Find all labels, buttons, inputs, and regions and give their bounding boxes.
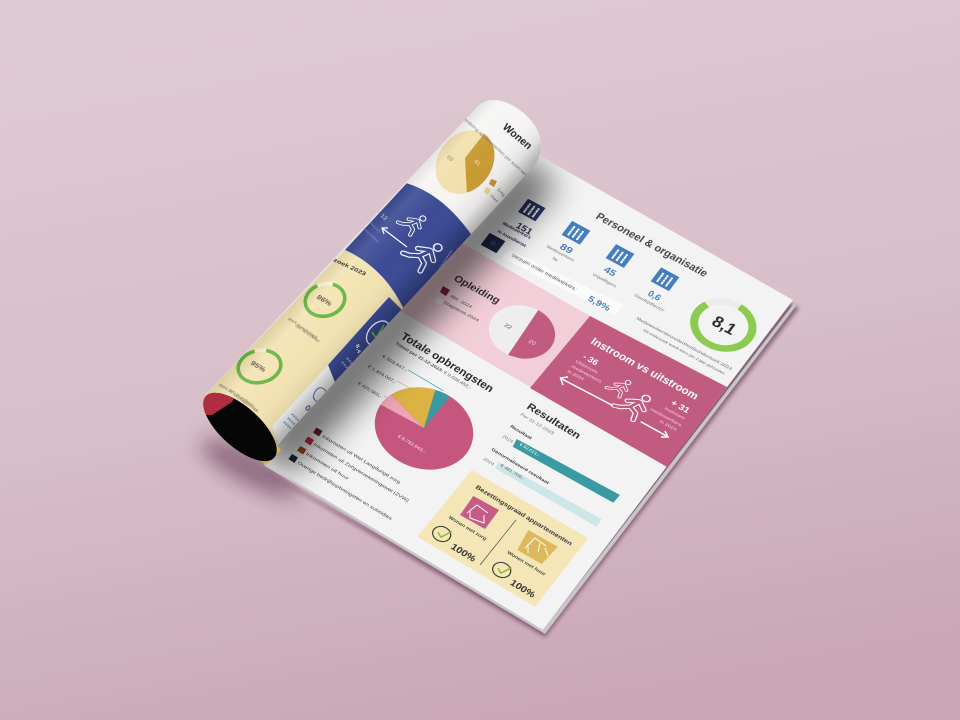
- roll: blue band icons: medewerkers: [361, 226, 380, 244]
- legend: opleiding: Bbl. 2024: [449, 294, 474, 309]
- legend: opbrengsten: [288, 428, 410, 522]
- roll: lower white block icons: [284, 388, 326, 434]
- stat: 0,6 deeltijdfactor: [633, 289, 666, 313]
- roll: wonen subtitle: Verdeling appartementen per soort wonen: [461, 115, 534, 182]
- arrow: instroom right: [641, 422, 668, 437]
- stat: 151 medewerkers in loondienst: in loondienst: [496, 229, 527, 249]
- text: per datum: Per 31-12-2023: [519, 412, 555, 436]
- labels: pie amounts: € 1.304.097,-: [367, 364, 398, 385]
- roll: yellow band heading: zoek 2023: [332, 258, 367, 278]
- roll: blue band icons: [361, 207, 456, 273]
- chart: resultaat bar: [501, 424, 620, 503]
- stat: 151 medewerkers in loondienst: 151: [513, 221, 535, 237]
- roll: wonen heading: Wonen: [500, 122, 534, 152]
- roll: caption 95%: geeft de verpleegkundige: [218, 382, 261, 413]
- roll: wonen legend: Zorg: [496, 187, 507, 198]
- stat: verzuim 5,9%: 5,9%: [585, 294, 613, 314]
- stat: verzuim 5,9%: [510, 253, 613, 314]
- icon: fte: [562, 221, 590, 245]
- stat: instroom +31: in 2024: [658, 419, 678, 432]
- roll: opening: [203, 392, 277, 462]
- heading: personeel en organisatie: Personeel & organisatie: [593, 210, 711, 280]
- text: medewerkerstevredenheidsonderzoek: Medewerkerstevredenheidsonderzoek 2023: [635, 316, 734, 371]
- stat: instroom +31: [649, 398, 692, 432]
- roll: yellow band: [200, 250, 405, 470]
- chart: opleiding pie: 22: [503, 323, 512, 331]
- heading: bezettingsgraad: Bezettingsgraad appartementen: [474, 484, 573, 547]
- chart: resultaat bar: € 92.613,-: [519, 442, 541, 457]
- chart: resultaat bar: 2024: [501, 434, 515, 444]
- roll: wonen pie: 69: [445, 155, 455, 164]
- panel: opleiding light pink: [395, 225, 590, 388]
- roll: ring 86%: 86%: [315, 293, 334, 308]
- stat: instroom +31: medewerkers: [649, 407, 683, 428]
- roll: caption 86%: aan bij anderen: [294, 323, 321, 343]
- roll: blue band icons: - 12: [376, 209, 389, 223]
- roll: wonen pie: 41: [472, 159, 482, 168]
- icon: deeltijdfactor: [651, 267, 679, 291]
- chart: ring 8,1: 8,1: [708, 312, 741, 338]
- icon: wonen met zorg: [460, 496, 499, 529]
- chart: opleiding pie: 20: [527, 339, 537, 347]
- roll: ring 95%: 95%: [249, 359, 268, 374]
- text: wonen met zorg: Wonen met zorg: [447, 515, 488, 542]
- roll: lower white block: [272, 365, 336, 446]
- icon: check huur: [489, 559, 515, 581]
- icon: walking people: [605, 374, 653, 421]
- text: totaal: Totaal per 31-12-2023: € 9.026.452,-: [394, 341, 472, 391]
- stat: uitstroom -36: medewerkers: [570, 364, 604, 384]
- panel: bezettingsgraad: [417, 470, 588, 607]
- icon: medewerkers in loondienst: [518, 199, 545, 221]
- legend: opleiding: [434, 286, 480, 323]
- chart: opbrengsten pie: € 6.792.943,-: [396, 434, 427, 455]
- stat: uitstroom -36: [566, 352, 604, 384]
- stat: uitstroom -36: - 36: [581, 352, 600, 367]
- stat: 151 medewerkers in loondienst: [496, 221, 535, 249]
- stat: uitstroom -36: in 2024: [566, 369, 585, 381]
- icon: verzuim: [481, 233, 505, 253]
- roll: inner blue block: [328, 297, 405, 385]
- stat: 45 vrijwilligers: [591, 265, 618, 289]
- legend: opbrengsten: Overige bedrijfsopbrengsten en subsidies: [296, 461, 393, 522]
- stat: 100% zorg: 100%: [448, 542, 478, 564]
- heading: instroom vs uitstroom: Instroom vs uitstroom: [588, 335, 701, 402]
- labels: pie amounts: [357, 354, 443, 400]
- stat: 0,6 deeltijdfactor: Deeltijdfactor: [633, 293, 666, 313]
- stat: 100% huur: 100%: [508, 578, 537, 600]
- roll: caption 95%: aan bij anderen: [228, 387, 255, 407]
- chart: genormaliseerd resultaat bar: € 461.709,-: [499, 463, 526, 481]
- roll: blue band icons: Uitstroom: [367, 220, 381, 233]
- chart: opbrengsten pie: [374, 387, 474, 470]
- legend: opbrengsten: Inkomsten uit huur: [304, 452, 350, 482]
- roll: wonen legend: Huur: [489, 193, 500, 204]
- stat: uitstroom -36: Uitstroom: [574, 359, 599, 375]
- roll: ring 95%: [236, 348, 283, 385]
- legend: opleiding: Stagiaires 2024: [442, 300, 480, 323]
- stat: 45 vrijwilligers: 45: [601, 265, 618, 279]
- chart: genormaliseerd resultaat bar: Genormaliseerd resultaat: [490, 447, 550, 485]
- roll: curled page: [190, 90, 550, 470]
- labels: pie amounts: € 425.565,-: [357, 381, 383, 399]
- legend: opbrengsten: Inkomsten uit Zorgverzekeringswet (ZVW): [312, 442, 410, 504]
- chart: genormaliseerd resultaat bar: 2024: [482, 457, 496, 467]
- stat: instroom +31: + 31: [669, 398, 692, 415]
- icon: vrijwilligers: [606, 244, 634, 268]
- roll shadow on page: [272, 170, 540, 460]
- divider: [480, 520, 516, 565]
- chart: resultaat bar: Resultaat: [509, 424, 533, 440]
- heading: totale opbrengsten: Totale opbrengsten: [398, 330, 496, 395]
- icon: wonen met huur: [517, 530, 558, 564]
- page thickness edge: [263, 302, 796, 634]
- stat: 45 vrijwilligers: Vrijwilligers: [591, 272, 618, 289]
- icon: check zorg: [429, 523, 455, 545]
- text: medewerkerstevredenheidsonderzoek: Dit onderzoek wordt eens per 2 jaar gehouden.: [642, 328, 727, 376]
- roll: wonen legend: [484, 179, 505, 202]
- panel: instroom vs uitstroom: [530, 316, 727, 467]
- roll: wonen pie: [436, 130, 494, 194]
- roll: ring 86%: [303, 282, 347, 318]
- roll: cylinder shading: [205, 100, 541, 462]
- stat: instroom +31: Instroom: [663, 406, 686, 421]
- page shadow: [194, 300, 799, 637]
- roll: inner blue content: [341, 320, 389, 369]
- stat: 0,6 deeltijdfactor: 0,6: [645, 289, 663, 303]
- heading: resultaten: Resultaten: [524, 402, 583, 441]
- legend: opbrengsten: Inkomsten uit Wet Langdurige zorg: [321, 434, 402, 485]
- roll: gold sliver: [262, 446, 281, 465]
- chart: ring 8,1: [681, 290, 766, 360]
- stat: 89 fte: 89: [557, 242, 575, 257]
- stat: 89 fte: Medewerkers: [545, 244, 576, 263]
- stat: 89 fte: fte: [551, 256, 559, 263]
- chart: opleiding pie: [489, 305, 556, 359]
- labels: pie amounts: € 503.847,-: [381, 354, 409, 373]
- text: wonen met huur: Wonen met huur: [506, 550, 547, 577]
- heading: opleiding: Opleiding: [451, 273, 502, 306]
- stat: verzuim 5,9%: Verzuim onder medewerkers:: [510, 253, 578, 292]
- page: personeel en financien: [263, 150, 793, 630]
- arrow: uitstroom left: [560, 377, 612, 405]
- roll: blue band: [345, 183, 475, 312]
- roll: caption 86%: geeft tevredenheid: [287, 316, 319, 340]
- roll: inner blue content: 8,4: [355, 344, 361, 355]
- stat: 151 medewerkers in loondienst: Medewerkers: [501, 221, 532, 241]
- chart: genormaliseerd resultaat bar: [482, 447, 602, 527]
- panel: verzuim band: [502, 250, 624, 315]
